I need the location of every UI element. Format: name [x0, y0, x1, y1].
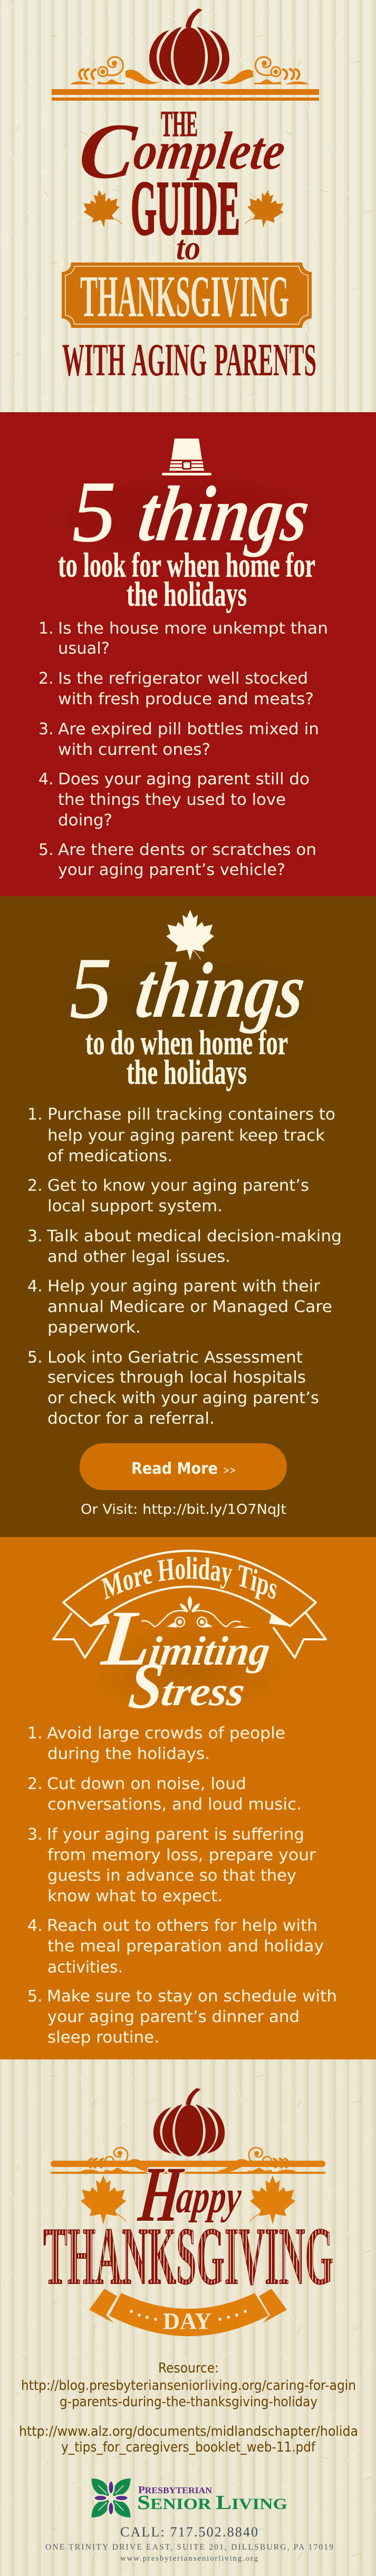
list: things to do: 1. — [27, 1105, 43, 1124]
panel: cream header background — [0, 0, 376, 412]
ribbon: day — [89, 2289, 287, 2336]
list: things to do: Look into Geriatric Assessment — [47, 1348, 303, 1367]
logo: presbyterian senior living — [92, 2478, 287, 2517]
list: things to look for: with fresh produce and meats? — [58, 690, 314, 708]
icon: pilgrim hat — [162, 439, 211, 475]
list: limiting stress: from memory loss, prepare your — [47, 1846, 316, 1864]
button: read more — [80, 1443, 287, 1490]
script shadow — [47, 472, 332, 567]
text block: resources: Resource: — [158, 2360, 219, 2376]
subheading — [85, 1024, 288, 1092]
panel: things to do — [0, 896, 376, 1537]
list: things to do: of medications. — [47, 1147, 172, 1165]
list: things to look for: doing? — [58, 811, 112, 830]
panel: limiting stress — [0, 1537, 376, 2059]
list: things to do: Talk about medical decision-making — [46, 1227, 342, 1246]
list: limiting stress: Avoid large crowds of people — [47, 1724, 285, 1743]
contact details: CALL: 717.502.8840 — [120, 2524, 258, 2540]
icon: right flourish — [219, 57, 309, 84]
script shadow — [87, 1624, 287, 1718]
list: things to do: 3. — [27, 1227, 43, 1246]
icon: footer left leaf — [81, 2175, 126, 2224]
list: limiting stress: 3. — [27, 1825, 43, 1844]
list: things to look for: your aging parent’s vehicle? — [58, 861, 285, 879]
list: things to look for: 2. — [38, 669, 54, 688]
list: limiting stress: activities. — [47, 1958, 123, 1977]
panel: things to look for — [0, 412, 376, 896]
list: things to look for: Are expired pill bottles mixed in — [58, 720, 319, 738]
contact details: www.presbyterianseniorliving.org — [120, 2554, 258, 2563]
panel: cream footer background — [0, 2059, 376, 2576]
heading: happy — [134, 2150, 244, 2238]
heading: limiting stress: S — [126, 1649, 167, 1723]
icon: header pumpkin — [149, 8, 229, 85]
list: things to do: services through local hospitals — [47, 1368, 306, 1387]
list: things to look for — [38, 619, 328, 879]
list: limiting stress: Make sure to stay on schedule with — [47, 1987, 337, 2006]
list: limiting stress: If your aging parent is suffering — [47, 1825, 304, 1844]
heading: 5 things — [70, 940, 311, 1036]
heading: happy: H — [134, 2150, 187, 2238]
icon: logo flower — [92, 2478, 131, 2517]
heading: 5 things — [72, 463, 315, 560]
footer double rule — [51, 2161, 325, 2174]
list: limiting stress: during the holidays. — [47, 1745, 210, 1763]
list: limiting stress — [27, 1724, 337, 2047]
list: limiting stress: know what to expect. — [47, 1887, 223, 1906]
list: things to look for: 1. — [38, 619, 54, 638]
list: things to do: paperwork. — [47, 1318, 141, 1337]
icon: right maple leaf — [245, 187, 286, 230]
list: limiting stress: 4. — [27, 1917, 43, 1935]
title: to — [176, 229, 200, 267]
list: things to look for: Does your aging parent still do — [58, 770, 310, 789]
button: read more: Read More — [131, 1460, 218, 1478]
list: limiting stress: your aging parent’s dinner and — [47, 2008, 300, 2026]
list: limiting stress: 1. — [27, 1724, 43, 1743]
ribbon: day: DAY — [163, 2308, 211, 2334]
icon: footer right flourish — [216, 2147, 297, 2172]
list: things to look for: 3. — [38, 720, 54, 738]
icon: left flourish — [70, 57, 160, 84]
list: things to do: doctor for a referral. — [47, 1409, 215, 1428]
heading: 5 things: 5 — [72, 463, 116, 560]
list: things to look for: Is the refrigerator well stocked — [58, 669, 308, 688]
contact details — [45, 2524, 333, 2563]
list: limiting stress: 2. — [27, 1775, 43, 1793]
list: things to look for: Is the house more unkempt than — [58, 619, 328, 638]
logo: presbyterian senior living: SENIOR LIVING — [137, 2492, 287, 2514]
list: limiting stress: the meal preparation and holiday — [47, 1937, 324, 1956]
subheading: the holidays — [127, 575, 247, 614]
icon: footer left flourish — [80, 2147, 161, 2172]
heading: 5 things: things — [133, 470, 315, 558]
list: limiting stress: 5. — [27, 1987, 43, 2006]
list: limiting stress: sleep routine. — [47, 2028, 159, 2047]
list: things to look for: with current ones? — [58, 741, 210, 759]
contact details: ONE TRINITY DRIVE EAST, SUITE 201, DILLSBURG, PA 17019 — [45, 2543, 333, 2552]
subheading — [58, 546, 315, 614]
list: things to do: 2. — [27, 1177, 43, 1195]
text block: resources — [19, 2360, 358, 2455]
list: things to look for: the things they used to love — [58, 791, 286, 809]
banner: more holiday tips — [52, 1550, 327, 1659]
heading: limiting stress: imiting — [147, 1628, 273, 1674]
list: things to do: annual Medicare or Managed Care — [47, 1298, 332, 1316]
icon: left maple leaf — [81, 187, 122, 230]
list: things to do: Get to know your aging parent’s — [47, 1177, 309, 1195]
list: things to look for: usual? — [58, 639, 110, 658]
list: things to do — [27, 1105, 342, 1428]
list: things to do: or check with your aging parent’s — [47, 1389, 319, 1407]
heading: limiting stress: L — [98, 1594, 156, 1682]
icon: footer right leaf — [250, 2175, 295, 2224]
button: read more: >> — [223, 1464, 236, 1476]
text block: resources: g-parents-during-the-thanksgiving-holiday — [60, 2394, 317, 2410]
list: things to do: 4. — [27, 1277, 43, 1296]
heading: limiting stress — [98, 1594, 273, 1723]
list: limiting stress: Cut down on noise, loud — [47, 1775, 246, 1793]
title: omplete — [130, 121, 289, 181]
list: things to do: and other legal issues. — [47, 1248, 230, 1266]
logo wordmark: PRESBYTERIAN — [138, 2484, 213, 2496]
list: limiting stress: Reach out to others for help with — [47, 1917, 317, 1935]
list: things to do: local support system. — [47, 1197, 223, 1216]
heading: 5 things: things — [131, 947, 311, 1034]
list: things to look for: Are there dents or scratches on — [58, 841, 316, 859]
list: things to look for: 4. — [38, 770, 54, 789]
script shadow — [45, 954, 330, 1049]
list: limiting stress: guests in advance so that they — [47, 1867, 296, 1885]
list: things to look for: 5. — [38, 841, 54, 859]
list: limiting stress: conversations, and loud music. — [47, 1795, 302, 1814]
text block: resources: y_tips_for_caregivers_booklet_web-11.pdf — [61, 2439, 316, 2455]
ornament — [141, 1596, 251, 1628]
link: or visit: Or Visit: http://bit.ly/1O7NqJt — [81, 1502, 286, 1518]
list: things to do: help your aging parent keep track — [47, 1126, 325, 1145]
banner: more holiday tips: More Holiday Tips — [101, 1557, 277, 1600]
title: C — [75, 107, 141, 195]
list: things to do: Purchase pill tracking containers to — [47, 1105, 335, 1124]
header double rule — [52, 89, 319, 101]
heading: 5 things: 5 — [70, 940, 112, 1036]
title: THE — [161, 104, 198, 144]
icon: footer pumpkin — [153, 2088, 225, 2156]
icon: maple leaf — [166, 910, 214, 960]
list: things to do: Help your aging parent with their — [47, 1277, 321, 1296]
title — [75, 104, 289, 267]
subheading: the holidays — [127, 1053, 247, 1092]
heading: happy: appy — [174, 2170, 244, 2223]
list: things to do: 5. — [27, 1348, 43, 1367]
heading: limiting stress: tress — [159, 1668, 248, 1714]
